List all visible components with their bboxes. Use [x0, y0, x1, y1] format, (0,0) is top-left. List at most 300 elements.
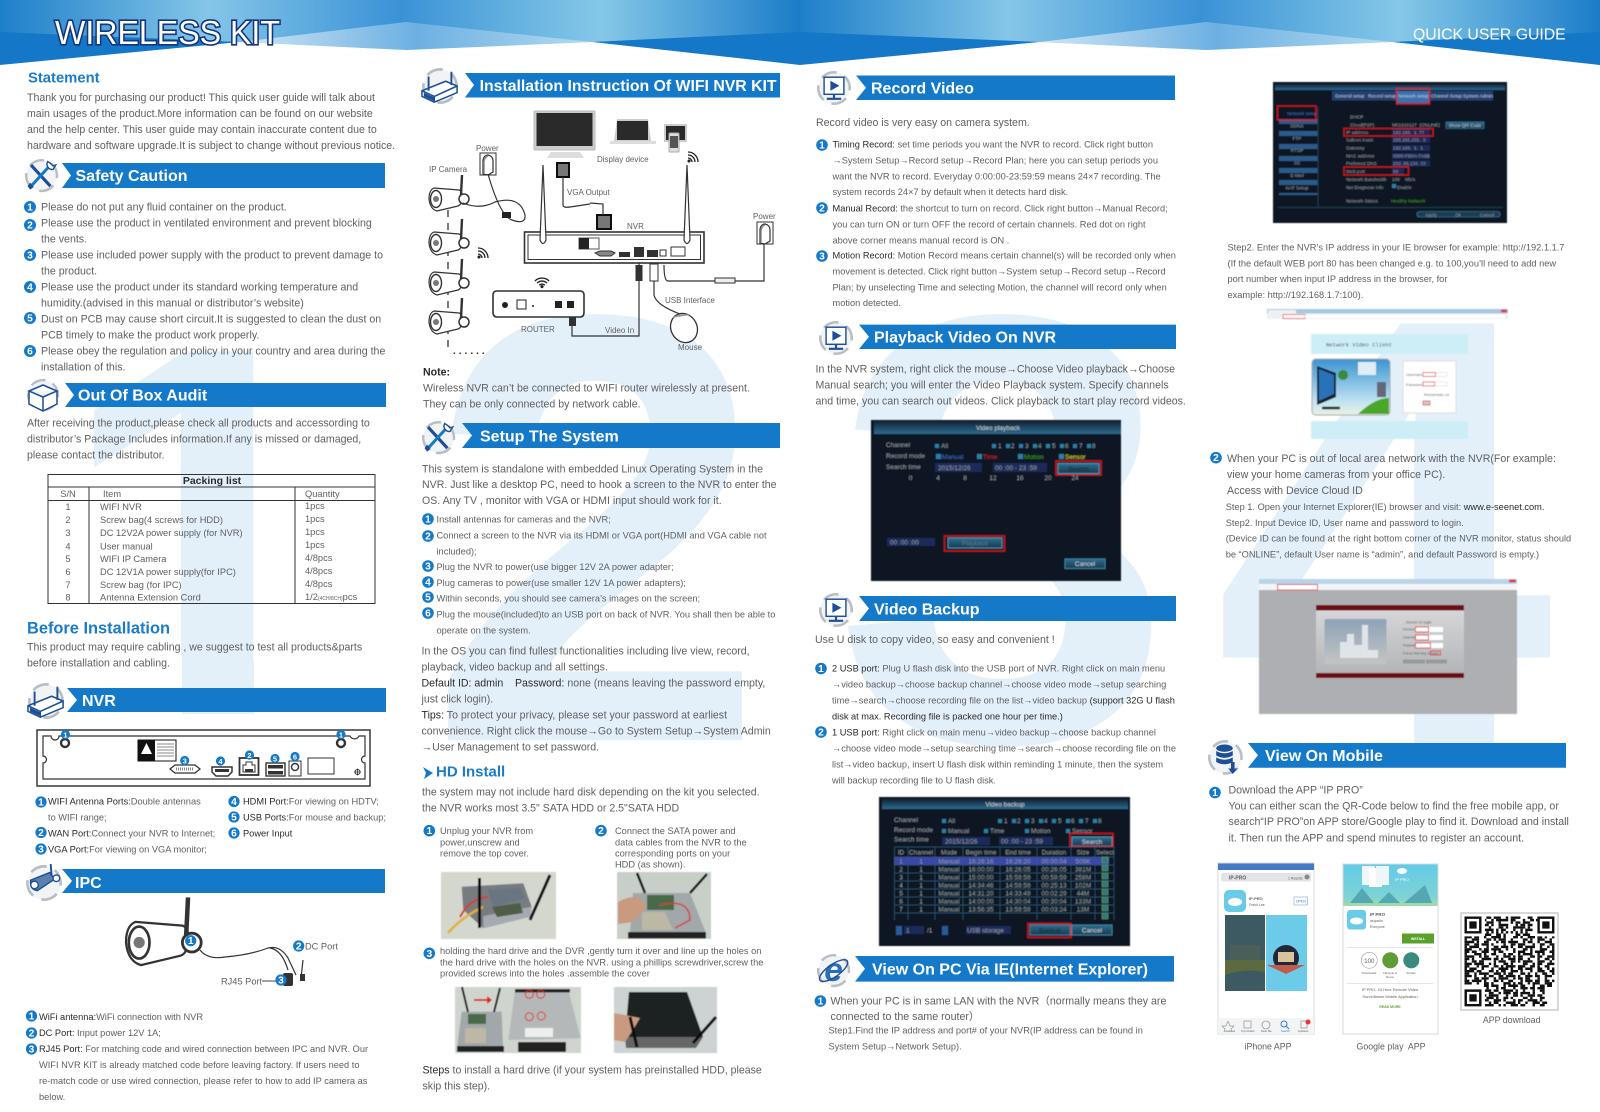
table: packing list: Packing list [183, 475, 242, 487]
caption: iPhone APP: iPhone APP [1245, 1042, 1292, 1052]
video backup list: disk at max. Recording file is packed one hour per time.) [832, 712, 1063, 722]
record video list: Timing Record: set time periods you want the NVR to record. Click right button [832, 140, 1153, 150]
screenshot: video backup: 2015/12/26 [945, 838, 978, 846]
NVR port legend: USB Ports:For mouse and backup; [243, 812, 386, 822]
text: functionality and tips [420, 646, 771, 754]
heading: IPC: IPC [75, 875, 102, 892]
app screenshot: iPhone: Frank Lee [1249, 903, 1265, 907]
panel: safety list: PCB timely to make the product work properly. [41, 330, 259, 342]
screenshot: network video client login: Password : [1406, 382, 1426, 387]
heading: safety caution [62, 163, 385, 188]
video backup list: 2 [818, 728, 824, 738]
setup steps list [422, 513, 775, 636]
screenshot: video playback: Cancel [1075, 561, 1096, 568]
record video list: movement is detected. Click right button→System setup→Record setup→Record [832, 266, 1166, 276]
screenshot: video backup: 509K [1075, 858, 1091, 866]
screenshot: video backup: 44M [1077, 890, 1089, 898]
heading: IPC [62, 869, 385, 893]
screenshot: video backup: 14:31:20 [968, 890, 994, 898]
panel: statement: main usages of the product.More information can be found on our website [27, 108, 373, 120]
screenshot: network setup: Subnet mask [1346, 138, 1374, 142]
text: download app: 1 [1212, 788, 1218, 799]
panel: statement [27, 70, 395, 152]
photo: closed NVR [614, 987, 717, 1053]
text: HD intro: the NVR works most 3.5" SATA HDD or 2.5"SATA HDD [422, 802, 680, 814]
screenshot: video playback: 2015/12/26 [938, 465, 971, 472]
screenshot: video playback: 8 [1092, 443, 1096, 450]
panel: safety list: Please use the product under its standard working temperature and [41, 282, 358, 294]
text: LAN steps: connected to the same router） [830, 1010, 980, 1023]
screenshot: video backup: 4 [1044, 818, 1048, 825]
heading: setup the system: Setup The System [480, 428, 619, 446]
app screenshot: iPhone: IP-PRO [1249, 896, 1263, 901]
text: playback intro [816, 364, 1186, 408]
IPC legend: WiFi antenna:WiFi connection with NVR [39, 1012, 203, 1022]
screenshot: video playback: Record mode [886, 453, 925, 460]
heading: installation instruction: Installation Instruction Of WIFI NVR KIT [480, 78, 777, 95]
background watermark number 1: 1 [58, 237, 351, 826]
IPC legend [26, 1010, 368, 1102]
screenshot: video backup: Motion [1031, 828, 1051, 835]
screenshot: video backup: 13:56:35 [968, 906, 994, 914]
text: remote access steps [1210, 452, 1571, 560]
icon: playback [814, 316, 858, 360]
text: functionality and tips: →User Management to set password. [422, 742, 599, 754]
text: remote access steps: (Device ID can be found at the right bottom corner of the NVR monitor, status should [1226, 534, 1571, 544]
app screenshot: Google Play: Lifestyle & [1383, 971, 1397, 975]
screenshot: network setup: MAC address [1346, 154, 1375, 158]
caption: APP download: APP download [1483, 1015, 1541, 1025]
screenshot: video backup: Manual [938, 906, 960, 914]
screenshot: video backup: 3 [1031, 818, 1035, 825]
screenshot: video backup: Cancel [1082, 928, 1103, 934]
record video list: →System Setup→Record setup→Record Plan; here you can setup periods you [832, 156, 1158, 166]
app screenshot: iPhone: Search [1281, 1029, 1290, 1033]
screenshot: video backup: 1 [919, 882, 923, 890]
text: LAN steps [815, 994, 1166, 1052]
IPC legend: WIFI NVR KIT is already matched code before leaving factory. If users need to [39, 1060, 359, 1070]
screenshot: video backup: 1 [899, 858, 903, 866]
heading: safety caution: Safety Caution [76, 168, 188, 185]
screenshot: video backup: Sensor [1072, 828, 1093, 835]
screenshot: network setup: DHCP [1350, 114, 1363, 120]
table: packing list: Antenna Extension Cord [100, 592, 201, 602]
HD step 2: HDD (as shown). [615, 860, 685, 870]
text: audit [27, 418, 370, 462]
NVR port legend: VGA Port:For viewing on VGA monitor; [48, 844, 207, 854]
table: packing list: 5 [65, 554, 71, 564]
video backup list: 2 USB port: Plug U flash disk into the USB port of NVR. Right click on main menu [832, 664, 1165, 674]
screenshot: video backup: 1 [919, 898, 923, 906]
screenshot: video backup: Manual [938, 890, 960, 898]
screenshot: video backup: 14:30:04 [1005, 898, 1031, 906]
screenshot: video playback: 00 :00 :00 [890, 540, 919, 546]
IPC legend: RJ45 Port: For matching code and wired connection between IPC and NVR. Our [39, 1044, 368, 1054]
text: steps note: skip this step). [422, 1080, 490, 1092]
app screenshot: Google Play: Downloads [1362, 971, 1377, 975]
screenshot: video playback: Search time [886, 464, 921, 471]
panel: safety list [24, 201, 385, 374]
screenshot: video backup: 1 [906, 928, 910, 934]
screenshot: video backup: USB storage [967, 928, 1004, 934]
panel: safety list: 6 [27, 347, 33, 358]
video backup list: list→video backup, insert U flash disk within reminding 1 minute, then the system [832, 760, 1163, 770]
screenshot: video backup: 16:26:16 [968, 858, 994, 866]
NVR port legend: 1 [38, 798, 44, 808]
installation diagram: IP Camera [429, 165, 468, 174]
screenshot: video backup: 3 [899, 874, 903, 882]
panel: statement: and the help center. This user guide may contain inaccurate content due to [27, 124, 377, 136]
header banner [0, 0, 1600, 70]
screenshot: video backup: 258M [1075, 874, 1091, 882]
app screenshot: iPhone [1218, 863, 1314, 1034]
text: download app: it. Then run the APP and spend minutes to register an account. [1228, 832, 1524, 844]
screenshot: video backup: 8 [1098, 818, 1102, 825]
heading: installation instruction [465, 73, 780, 98]
record video list: you can turn ON or turn OFF the record of certain channels. Red dot on right [832, 220, 1146, 230]
camera illustration: 3 [278, 976, 284, 986]
table: packing list: DC 12V2A power supply (for NVR) [100, 528, 243, 538]
screenshot: network setup: 0000-FB0A-7A6B [1393, 154, 1430, 158]
screenshot: video playback: 3 [1025, 443, 1029, 450]
screenshot: video backup: 1 [919, 890, 923, 898]
table: packing list: 4/8pcs [305, 566, 333, 576]
text: functionality and tips: just click login). [420, 694, 493, 706]
screenshot: network setup [1273, 82, 1507, 223]
HD step 2: data cables from the NVR to the [615, 838, 747, 848]
text: download app: Download the APP “IP PRO” [1228, 784, 1363, 796]
screenshot: video backup: 00:59:59 [1041, 874, 1067, 882]
background watermark number 4: 4 [1214, 192, 1557, 873]
table: packing list: WIFI NVR [100, 502, 142, 512]
background watermark number 3: 3 [834, 189, 1173, 870]
screenshot: video backup: Manual [938, 874, 960, 882]
heading: view on mobile: View On Mobile [1265, 748, 1383, 765]
record video list: 2 [819, 204, 825, 214]
icon: tools [20, 154, 63, 197]
screenshot: video playback: 6 [1065, 443, 1069, 450]
panel: safety list: humidity.(advised in this manual or distributor’s website) [41, 298, 304, 310]
app screenshot: iPhone: Top Charts [1241, 1029, 1255, 1033]
HD step 3: the hard drive with the holes on the NVR. using a phillips screwdriver,screw the [440, 958, 763, 968]
screenshot: video playback: 4 [936, 475, 940, 482]
panel: statement: Thank you for purchasing our product! This quick user guide will talk about [27, 92, 375, 104]
screenshot: video backup: 102M [1075, 882, 1091, 890]
screenshot: video playback: 0 [909, 475, 913, 482]
app screenshot: Google Play: IP PRO [1395, 877, 1409, 882]
screenshot: video backup: Manual [948, 828, 970, 835]
screenshot: video backup: 16:26:20 [1005, 858, 1031, 866]
text: download app: You can either scan the QR-Code below to find the free mobile app, or [1228, 800, 1559, 812]
NVR back panel diagram: 3 [183, 756, 187, 766]
note [423, 366, 750, 410]
record video list: Manual Record: the shortcut to turn on record. Click right button→Manual Record; [832, 204, 1168, 214]
text: functionality and tips: convenience. Right click the mouse→Go to System Setup→System Admin [422, 726, 771, 738]
screenshot: video backup: Channel [909, 850, 934, 856]
table: packing list: 1pcs [305, 514, 325, 524]
heading: out of box audit: Out Of Box Audit [78, 388, 208, 404]
screenshot: network setup: NAT Setup [1286, 186, 1309, 190]
panel: safety list: installation of this. [41, 362, 125, 374]
installation diagram: Power [476, 144, 499, 153]
record video list: Plan; by unselecting Time and selecting Motion, the channel will record only when [832, 282, 1167, 292]
NVR port legend: 3 [38, 844, 44, 856]
installation diagram: VGA Output [567, 188, 610, 197]
screenshot: network setup: General setup [1335, 94, 1365, 98]
NVR back panel diagram: 1 [63, 730, 68, 740]
setup steps list: 5 [425, 592, 431, 604]
HD step 3: 3 [426, 949, 432, 960]
screenshot: video playback: 4 [1038, 443, 1042, 450]
screenshot: video backup: Begin time [966, 850, 997, 856]
screenshot: network setup: 192.168. 1. 77 [1393, 130, 1425, 135]
screenshot: network setup: Net Diagnose Info [1346, 185, 1384, 190]
screenshot: network setup: Channel Setup [1431, 94, 1462, 98]
table: packing list: Screw bag(4 screws for HDD) [100, 515, 223, 525]
screenshot: video backup: 14:00:00 [968, 898, 994, 906]
installation diagram: ...... [453, 346, 488, 357]
heading: video backup [859, 596, 1176, 621]
text: playback intro: Manual search; you will enter the Video Playback system. Specify channels [816, 380, 1169, 392]
record video list [816, 117, 1176, 308]
text: HD intro: the system may not include hard disk depending on the kit you selected. [422, 786, 760, 798]
screenshot: video playback [871, 420, 1121, 581]
NVR port legend: 5 [231, 812, 237, 824]
HD step 1: remove the top cover. [440, 848, 529, 858]
screenshot: network setup: IP address [1346, 130, 1369, 135]
icon: IE logo: e [824, 952, 843, 989]
installation diagram: Mouse [678, 343, 703, 352]
text: setup intro: OS. Any TV , monitor with VGA or HDMI input should work for it. [422, 495, 722, 507]
screenshot: video backup: 00:25:13 [1041, 882, 1067, 890]
heading: record video: Record Video [871, 80, 974, 98]
icon: NVR [23, 678, 69, 724]
screenshot: video backup: 13M [1077, 906, 1089, 914]
screenshot: video playback: Manual [942, 454, 964, 461]
heading: playback video: Playback Video On NVR [874, 330, 1056, 346]
text: audit: please contact the distributor. [27, 450, 165, 462]
text: playback intro: and time, you can search out videos. Click playback to start play record videos. [816, 396, 1186, 408]
heading: NVR [67, 688, 386, 712]
installation diagram: NVR [627, 222, 644, 231]
installation diagram: USB Interface [665, 296, 715, 305]
table: packing list: User manual [100, 542, 153, 552]
IPC legend: below. [39, 1092, 65, 1102]
table: packing list: 1pcs [305, 527, 325, 537]
screenshot: video playback: Time [983, 454, 998, 461]
HD step 1: 1 [426, 826, 432, 837]
screenshot: video backup: Video backup [985, 802, 1025, 808]
screenshot: video playback: 1 [998, 443, 1002, 450]
screenshot: network setup: Preferred DNS [1346, 161, 1377, 166]
screenshot: network setup: Network setup [1398, 94, 1429, 98]
screenshot: network setup: Network Status [1346, 198, 1378, 204]
app screenshot: iPhone: Updates [1298, 1029, 1309, 1033]
screenshot: network setup: Cancel [1480, 212, 1494, 218]
HD step 3: holding the hard drive and the DVR ,gently turn it over and line up the holes on [440, 946, 761, 956]
text: steps note: Steps to install a hard drive (if your system has preinstalled HDD, please [422, 1064, 762, 1076]
screenshot: video backup: 00:03:24 [1041, 906, 1067, 914]
panel: before installation: Before Installation [27, 620, 170, 638]
screenshot: video backup: 4 [899, 882, 903, 890]
screenshot: video backup: Manual [938, 866, 960, 874]
table: packing list: DC 12V1A power supply(for IPC) [100, 567, 236, 577]
screenshot: network setup: 80 [1393, 169, 1399, 174]
screenshot: video backup: 16:00:00 [968, 866, 994, 874]
screenshot: video backup: 5 [1058, 818, 1062, 825]
screenshot: video playback: All [941, 443, 949, 450]
app screenshot: iPhone: Featured [1224, 1029, 1236, 1033]
screenshot: video backup: Manual [938, 858, 960, 866]
screenshot: network video client login: Network Video Client [1326, 342, 1392, 348]
screenshot: video backup: 00:02:29 [1041, 890, 1067, 898]
setup steps list: 3 [425, 562, 431, 572]
text: download app [1209, 784, 1569, 844]
icon: record video [812, 66, 856, 110]
video backup list: time→search→choose recording file on the list→video backup (support 32G U flash [832, 696, 1175, 706]
note: Note: [423, 366, 450, 378]
NVR port legend: WIFI Antenna Ports:Double antennas [48, 796, 201, 806]
text: step 2 enter IP: port number when input IP address in the browser, for [1228, 274, 1447, 284]
table: packing list: WIFI IP Camera [100, 554, 167, 564]
screenshot: network setup: Ok [1455, 212, 1462, 218]
screenshot: video backup: 1 [1004, 818, 1008, 825]
screenshot: video backup: Select [1096, 850, 1114, 856]
note: Wireless NVR can’t be connected to WIFI router wirelessly at present. [423, 382, 750, 394]
icon: IPC camera [21, 860, 67, 906]
screenshot: network setup: 255.255.255. 0 [1393, 138, 1426, 142]
screenshot: network setup: Network Bandwidth [1346, 177, 1387, 182]
screenshot: video backup: 14:59:59 [1005, 882, 1031, 890]
panel: safety list: Please use included power supply with the product to prevent damage to [41, 250, 383, 262]
heading: HD install: HD Install [436, 764, 505, 780]
background watermark number 2: 2 [427, 189, 766, 870]
table: packing list: 1pcs [305, 501, 325, 511]
icon: box [22, 374, 64, 416]
panel: statement: Statement [28, 70, 100, 86]
text: playback intro: In the NVR system, right click the mouse→Choose Video playback→Choose [816, 364, 1175, 376]
NVR back panel diagram: 1 [339, 730, 343, 740]
screenshot: video playback: 7 [1079, 443, 1083, 450]
app screenshot: Google Play: Demo [1386, 975, 1394, 979]
screenshot: video backup: Size [1077, 850, 1090, 856]
heading: record video [856, 76, 1175, 100]
screenshot: video backup: 6 [1071, 818, 1075, 825]
video backup list: 1 USB port: Right click on main menu→video backup→choose backup channel [832, 728, 1156, 738]
screenshot: video backup: 2 [899, 866, 903, 874]
HD step 2: 2 [598, 826, 604, 837]
record video list: Motion Record: Motion Record means certain channel(s) will be recorded only when [832, 250, 1176, 260]
IPC legend: DC Port: Input power 12V 1A; [39, 1028, 161, 1038]
HD step 1: Unplug your NVR from [440, 826, 533, 836]
NVR port legend: WAN Port:Connect your NVR to Internet; [48, 828, 215, 838]
setup steps list: Connect a screen to the NVR via its HDMI or VGA port(HDMI and VGA cable not [436, 530, 767, 540]
photo: fitting hard drive [455, 987, 581, 1053]
screenshot: network setup: Record setup [1368, 94, 1396, 98]
screenshot: video backup: End time [1005, 850, 1031, 856]
NVR port legend: HDMI Port:For viewing on HDTV; [243, 796, 379, 806]
camera illustration: DC Port [305, 942, 338, 952]
heading: video backup: Video Backup [874, 602, 980, 618]
text: download app: search“IP PRO”on APP store/Google play to find it. Download and install [1228, 816, 1569, 828]
screenshot: video playback: 8 [963, 475, 967, 482]
screenshot: network setup: Gateway [1346, 146, 1365, 150]
screenshot: network setup: FTP [1293, 136, 1301, 141]
setup steps list: 1 [425, 514, 431, 526]
subtitle: quick user guide: QUICK USER GUIDE [1413, 26, 1566, 44]
setup steps list: Plug the mouse(included)to an USB port on back of NVR. You shall then be able to [436, 610, 775, 620]
panel: safety list: Please use the product in ventilated environment and prevent blocking [41, 218, 372, 230]
NVR back panel diagram: 4 [218, 757, 223, 766]
app screenshot: iPhone: 1 Results [1288, 876, 1303, 880]
app screenshot: iPhone: Near Me [1261, 1029, 1272, 1033]
screenshot: network setup: M01610127 (ONLINE) [1392, 122, 1440, 128]
heading: playback video [859, 325, 1176, 349]
screenshot: video backup: Mode [941, 850, 958, 856]
IPC legend: 3 [29, 1044, 35, 1056]
text: step 2 enter IP: (If the default WEB port 80 has been changed e.g. to 100,you’ll need to add new [1228, 258, 1556, 268]
record video list: 3 [819, 252, 825, 262]
screenshot: video playback: 12 [989, 475, 997, 482]
screenshot: network video client login [1267, 309, 1508, 439]
camera illustration: RJ45 Port [221, 976, 263, 986]
panel: safety list: 1 [27, 203, 33, 214]
panel: safety list: 3 [27, 251, 33, 262]
screenshot: video backup: 14:33:49 [1005, 890, 1031, 898]
screenshot: video playback: Channel [886, 442, 911, 449]
text: setup intro [422, 464, 777, 507]
HD step 3 [424, 946, 763, 978]
camera illustration [126, 897, 338, 986]
screenshot: video playback: 16 [1016, 475, 1024, 482]
record video list: system records 24×7 by default when it detects hard disk. [832, 187, 1068, 197]
table: packing list: 6 [65, 567, 71, 577]
caption: Google play APP: Google play APP [1357, 1042, 1426, 1052]
HD step 1 [424, 825, 533, 858]
screenshot: network setup: Enable [1397, 185, 1412, 190]
screenshot: video backup: 7 [1085, 818, 1089, 825]
screenshot: video backup: All [948, 818, 956, 825]
video backup list: 1 [818, 664, 824, 675]
text: step 2 enter IP [1228, 242, 1564, 300]
text: setup intro: NVR. Just like a desktop PC, need to hook a screen to the NVR to enter the [422, 479, 777, 491]
setup steps list: 6 [425, 608, 431, 620]
video backup list: →choose video mode→setup searching time→search→choose recording file on the [832, 744, 1176, 754]
screenshot: cloud login browser: Device ID: [1403, 628, 1421, 632]
app screenshot: Google Play: READ MORE [1379, 1005, 1401, 1009]
screenshot: video backup: Manual [938, 882, 960, 890]
NVR back panel diagram: 6 [293, 752, 297, 762]
table: packing list: Item [103, 489, 121, 499]
panel: safety list: the product. [41, 266, 97, 278]
screenshot: video backup: Search time [894, 836, 929, 844]
NVR port legend [35, 796, 386, 856]
icon: NVR [417, 63, 463, 109]
icon: IE logo [812, 949, 855, 992]
text: audit: After receiving the product,please check all products and accessording to [27, 418, 370, 430]
screenshot: network setup: Network setup [1287, 111, 1317, 116]
camera illustration: 2 [296, 942, 302, 952]
screenshot: network setup: 3G [1294, 160, 1300, 166]
screenshot: video backup: 15:59:59 [1005, 874, 1031, 882]
installation diagram: Power [753, 212, 776, 221]
video backup list: will backup recording file to U flash disk. [831, 776, 996, 786]
screenshot: cloud login browser: Device ID login [1406, 620, 1432, 624]
app screenshot: Google Play [1343, 864, 1438, 1034]
setup steps list: Plug cameras to power(use smaller 12V 1A power adapters); [436, 578, 686, 588]
table: packing list: 4 [65, 542, 71, 552]
screenshot: video backup: 381M [1075, 866, 1091, 874]
